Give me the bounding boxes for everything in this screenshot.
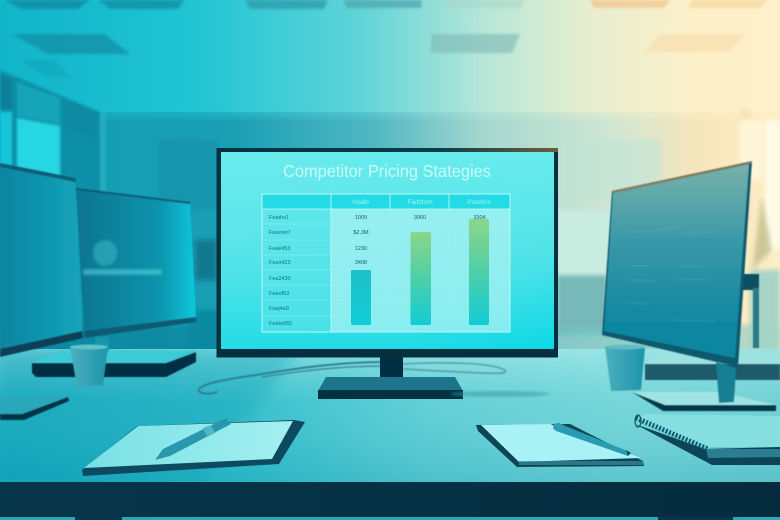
table row labels: Feakef83	[269, 321, 292, 327]
left front monitor	[0, 163, 83, 357]
monitor blurred text lines	[628, 228, 722, 321]
main monitor stand	[318, 356, 463, 399]
right monitor	[602, 161, 752, 367]
background: ceiling	[0, 0, 780, 115]
table row labels: Fea2430	[269, 276, 291, 282]
stand shadow	[450, 391, 550, 397]
table header labels: Proefics	[467, 199, 491, 206]
pricing table	[262, 194, 510, 332]
table row labels: Feaint23	[269, 260, 290, 266]
table values: 3060	[414, 215, 426, 221]
left back monitor	[76, 188, 196, 353]
ceiling light panels	[5, 0, 768, 78]
spiral notebook	[635, 414, 780, 465]
right cup	[605, 344, 645, 391]
table values: 3304	[473, 215, 486, 221]
left pen	[155, 418, 231, 460]
table row labels: Feamet7	[269, 230, 291, 236]
main monitor	[216, 148, 558, 358]
desk surface	[0, 349, 780, 484]
table row labels: Feak453	[269, 246, 290, 252]
center pen	[553, 423, 631, 456]
table header labels	[352, 199, 491, 206]
left back box	[32, 351, 196, 377]
table header labels: Hsalb	[352, 199, 369, 206]
desk legs	[75, 517, 733, 520]
table values: $2.3M	[353, 230, 369, 236]
bar chart	[351, 219, 489, 325]
cable	[199, 362, 506, 394]
monitor screen	[221, 152, 554, 349]
table values	[353, 215, 486, 266]
left cup	[70, 344, 108, 387]
left notebook	[82, 418, 305, 476]
table row labels: Feaths1	[269, 215, 289, 221]
table values: 1009	[355, 215, 367, 221]
left dark pad	[0, 397, 69, 420]
background: distant room right	[190, 110, 780, 350]
center notepad	[476, 423, 644, 467]
monitor bezel	[216, 148, 558, 358]
screen title: Competitor Pricing Stategies	[283, 161, 491, 181]
background: wall	[0, 112, 780, 352]
background: left windows	[0, 70, 218, 210]
right monitor back box	[645, 350, 780, 380]
table values: 3408	[355, 260, 367, 266]
table row labels: Feaof53	[269, 291, 289, 297]
desk front edge	[0, 482, 780, 517]
table header labels: Fadtifom	[407, 199, 433, 206]
right monitor stand	[632, 362, 776, 411]
table row labels	[269, 215, 292, 327]
table values: 1230	[355, 246, 367, 252]
right background chair	[741, 274, 759, 348]
table row labels: Fiaq4a9	[269, 306, 289, 312]
